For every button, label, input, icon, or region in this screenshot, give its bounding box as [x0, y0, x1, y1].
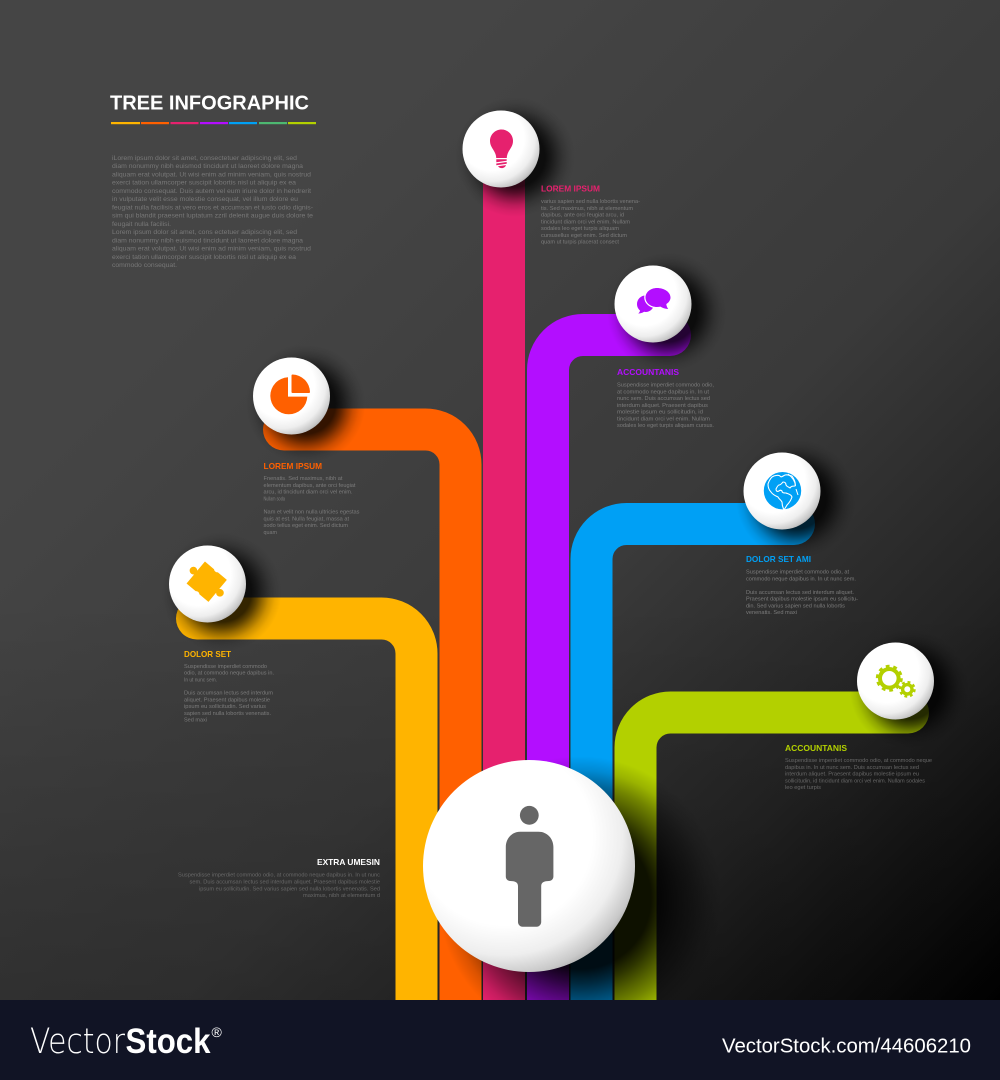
text: pink branch	[541, 184, 640, 246]
text: yellow branch: Suspendisse imperdiet commodo	[184, 664, 267, 670]
text: purple branch: ACCOUNTANIS	[617, 367, 679, 377]
footer bar	[0, 1000, 1000, 1080]
icon: gears	[878, 666, 914, 696]
text: yellow branch: Duis accumsan lectus sed interdum	[184, 691, 273, 697]
text: purple branch: at commodo neque dapibus in. In ut	[617, 390, 709, 396]
node: gears	[857, 642, 934, 720]
node: pie chart	[253, 358, 330, 434]
text: yellow branch	[184, 649, 274, 724]
text: orange branch: elementum dapibus, ante orci feugiat	[264, 483, 356, 489]
text: blue branch: venenatis. Sed maxi	[746, 610, 797, 616]
text: orange branch: LOREM IPSUM	[264, 461, 322, 471]
text: orange branch: Nam et velit non nulla ultricies egestas	[264, 510, 360, 516]
text: purple branch: Suspendisse imperdiet commodo odio,	[617, 383, 714, 389]
branch: yellow	[197, 618, 416, 1030]
intro text: commodo consequat. Duis autem vel eum iriure dolor in hendrerit	[112, 188, 311, 195]
footer url: VectorStock.com/44606210	[722, 1036, 971, 1058]
text: green branch: dapibus in. In ut nunc sem. Duis accumsan lectus sed	[785, 765, 919, 771]
text: pink branch: LOREM IPSUM	[541, 184, 600, 194]
icon: lightbulb	[490, 130, 513, 168]
text: extra block	[178, 857, 380, 899]
text: extra block: Suspendisse imperdiet commodo odio, at commodo neque dapibus in. In ut nunc	[178, 872, 380, 878]
text: purple branch: nunc sem. Duis accumsan lectus sed	[617, 396, 710, 402]
branch: orange	[284, 430, 460, 1030]
text: blue branch: DOLOR SET AMI	[746, 554, 811, 564]
intro text: Lorem ipsum dolor sit amet, cons ectetuer adipiscing elit, sed	[112, 229, 297, 236]
text: pink branch: quam ut turpis placerat consect	[541, 240, 619, 246]
intro text: exerci tation ullamcorper suscipit lobortis nisl ut aliquip ex ea	[112, 254, 296, 261]
text: orange branch	[264, 461, 360, 536]
text: purple branch	[617, 367, 714, 429]
rainbow divider	[111, 122, 316, 124]
text: blue branch	[746, 554, 858, 616]
text: pink branch: dapibus, ante orci feugiat arcu, id	[541, 212, 624, 218]
text: yellow branch: aliquet. Praesent dapibus molestie	[184, 697, 270, 703]
text: purple branch: sodales leo eget turpis aliquam cursus.	[617, 423, 714, 429]
footer logo	[30, 1022, 222, 1062]
intro text: in vulputate velit esse molestie consequat, vel illum dolore eu	[112, 196, 298, 203]
text: orange branch: Nullam soda	[264, 496, 286, 502]
text: orange branch: arcu, id tincidunt diam orci vel enim.	[264, 490, 353, 496]
text: pink branch: tincidunt diam orci vel enim. Nullam	[541, 219, 630, 225]
text: green branch: Suspendisse imperdiet commodo odio, at commodo neque	[785, 758, 932, 764]
branch: pink trunk	[483, 150, 525, 1010]
text: pink branch: tis. Sed maximus, nibh at elementum	[541, 206, 633, 212]
node: lightbulb	[462, 110, 540, 188]
intro text: diam nonummy nibh euismod tincidunt ut laoreet dolore magna	[112, 237, 303, 244]
intro text: feugait nulla facilisi.	[112, 221, 171, 228]
text: orange branch: quis at est. Nulla feugiat, massa at	[264, 516, 349, 522]
intro text: iLorem ipsum dolor sit amet, consectetuer adipiscing elit, sed	[112, 155, 297, 162]
text: blue branch: Suspendisse imperdiet commodo odio, at	[746, 570, 849, 576]
tree branches	[197, 150, 908, 1030]
text: extra block: EXTRA UMESIN	[317, 857, 380, 867]
footer logo: Stock	[126, 1022, 211, 1061]
text: green branch: leo eget turpis	[785, 785, 821, 791]
text: extra block: ipsum eu sollicitudin. Sed varius sapien sed nulla lobortis venenatis. Sed	[199, 886, 380, 892]
text: green branch: sollicitudin, id tincidunt diam orci vel enim. Nullam sodales	[785, 778, 925, 784]
text: purple branch: tincidunt diam orci vel enim. Nullam	[617, 416, 710, 422]
footer logo: Vector	[30, 1022, 126, 1062]
text: yellow branch: Sed maxi	[184, 718, 207, 724]
text: green branch	[785, 743, 932, 791]
text: green branch: ACCOUNTANIS	[785, 743, 847, 753]
branch: green	[636, 712, 908, 1030]
text: green branch: interdum aliquet. Praesent dapibus molestie ipsum eu	[785, 772, 919, 778]
text: pink branch: cursusellus eget enim. Sed dictum	[541, 233, 627, 239]
text: purple branch: interdum aliquet. Praesent dapibus	[617, 403, 708, 409]
text: yellow branch: ipsum eu sollicitudin. Sed varius	[184, 704, 266, 710]
node: globe	[744, 452, 820, 530]
branch: blue	[592, 524, 794, 1030]
text: extra block: maximus, nibh at elementum d	[303, 893, 380, 899]
node: speech bubbles	[614, 266, 692, 342]
text: blue branch: commodo neque dapibus in. In ut nunc sem.	[746, 576, 856, 582]
intro text	[112, 155, 313, 269]
center node: person	[423, 760, 635, 972]
intro text: commodo consequat.	[112, 262, 177, 269]
icon: globe	[764, 472, 801, 510]
icon: puzzle piece	[181, 557, 232, 606]
intro text: exerci tation ullamcorper suscipit lobortis nisl ut aliquip ex ea	[112, 180, 296, 186]
icon: speech bubbles	[637, 287, 670, 314]
text: orange branch: sodo tellus eget enim. Sed dictum	[264, 523, 348, 529]
title: TREE INFOGRAPHIC	[110, 92, 309, 114]
text: pink branch: sodales leo eget turpis aliquam	[541, 226, 619, 232]
text: orange branch: Fnenatis. Sed maximus, nibh at	[264, 476, 343, 482]
intro text: aliquam erat volutpat. Ut wisi enim ad minim veniam, quis nostrud	[112, 171, 311, 178]
text: yellow branch: DOLOR SET	[184, 649, 232, 659]
node: puzzle	[169, 546, 246, 622]
text: orange branch: quam	[264, 530, 277, 536]
branch: purple	[548, 335, 670, 1030]
icon: pie chart	[270, 374, 310, 414]
text: yellow branch: odio, at commodo neque dapibus in.	[184, 671, 274, 677]
footer logo: ®	[212, 1024, 222, 1040]
text: yellow branch: In ut nunc sem.	[184, 677, 217, 683]
intro text: aliquam erat volutpat. Ut wisi enim ad minim veniam, quis nostrud	[112, 246, 311, 252]
intro text: feugiat nulla facilisis at vero eros et accumsan et iusto odio dignis-	[112, 204, 313, 211]
icon: person	[506, 806, 553, 927]
text: pink branch: varius sapien sed nulla lobortis venena-	[541, 199, 640, 205]
text: blue branch: Praesent dapibus molestie ipsum eu sollicitu-	[746, 597, 858, 603]
intro text: sim qui blandit praesent luptatum zzril delenit augue duis dolore te	[112, 212, 313, 220]
text: blue branch: din. Sed varius sapien sed nulla lobortis	[746, 603, 845, 609]
text: purple branch: molestie ipsum eu sollicitudin, id	[617, 410, 703, 416]
intro text: diam nonummy nibh euismod tincidunt ut laoreet dolore magna	[112, 163, 303, 170]
text: yellow branch: sapien sed nulla lobortis venenatis.	[184, 711, 271, 717]
text: blue branch: Duis accumsan lectus sed interdum aliquet.	[746, 590, 854, 596]
text: extra block: sem. Duis accumsan lectus sed interdum aliquet. Praesent dapibus molestie	[190, 879, 380, 885]
